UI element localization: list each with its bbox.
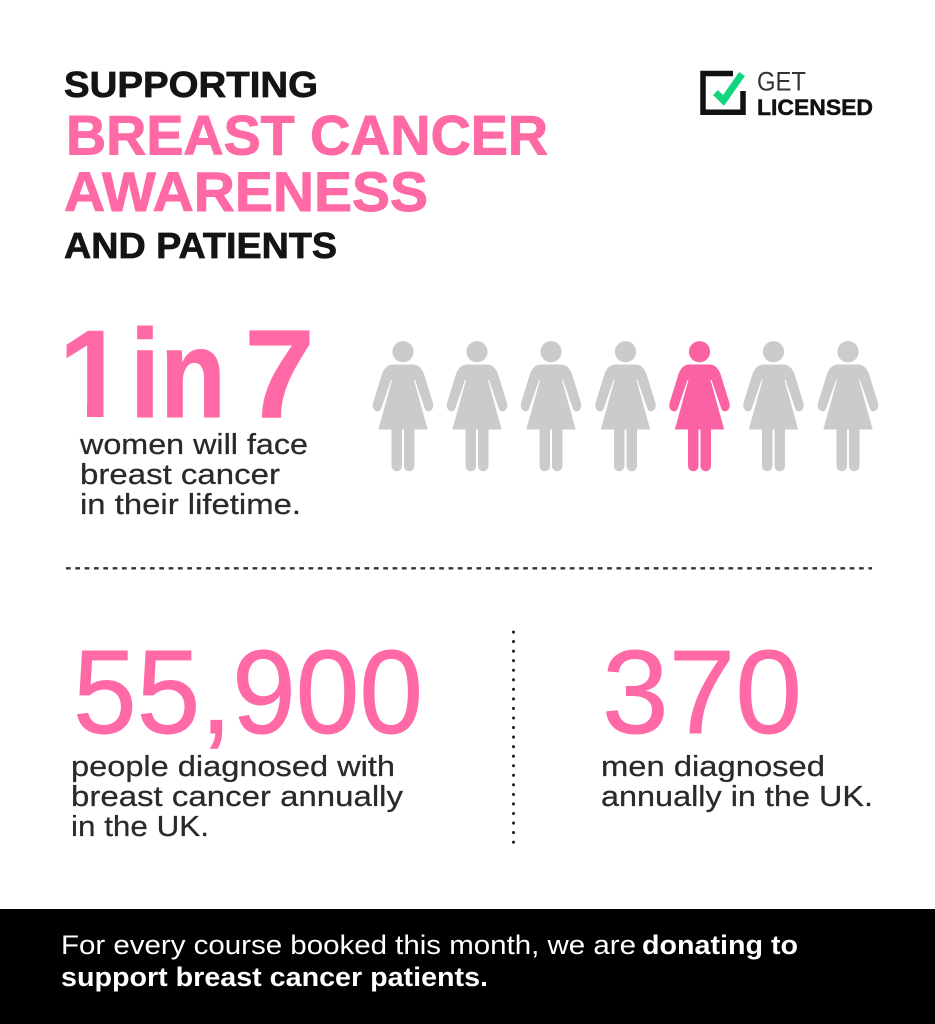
title: SUPPORTING [64, 64, 318, 105]
logo: Get Licensed [703, 66, 873, 120]
stat: 55,900: 55,900 [73, 626, 423, 759]
logo: Get Licensed: GET [757, 66, 806, 96]
text: people diagnosed: in the UK. [71, 811, 209, 843]
pictogram: seven women, one highlighted [373, 341, 878, 471]
text: people diagnosed [71, 751, 404, 843]
text: women will face breast cancer: women will face [79, 429, 308, 461]
text: men diagnosed: annually in the UK. [601, 781, 873, 813]
text: men diagnosed: men diagnosed [601, 751, 825, 783]
stat: 1 in 7: 7 [244, 305, 314, 444]
title [64, 64, 548, 266]
stat: 1 in 7 [66, 326, 310, 418]
title: AWARENESS [64, 160, 428, 223]
stat: 1 in 7: in [130, 305, 226, 444]
text: women will face breast cancer: breast cancer [80, 459, 280, 491]
title: AND PATIENTS [64, 225, 337, 266]
text: women will face breast cancer [79, 429, 308, 521]
text: women will face breast cancer: in their lifetime. [80, 489, 301, 521]
logo: Get Licensed: LICENSED [757, 95, 873, 120]
stat: 1 in 7: 1 [58, 305, 128, 444]
footer banner [0, 909, 935, 1024]
text: people diagnosed: breast cancer annually [71, 781, 404, 813]
footer banner: donating to [642, 930, 798, 960]
stat: 370: 370 [602, 626, 802, 759]
title: BREAST CANCER [66, 104, 548, 166]
text: men diagnosed [601, 751, 873, 813]
text: people diagnosed: people diagnosed with [71, 751, 395, 783]
footer banner: For every course booked this month, we are [61, 930, 636, 960]
footer banner: support breast cancer patients. [61, 962, 488, 992]
